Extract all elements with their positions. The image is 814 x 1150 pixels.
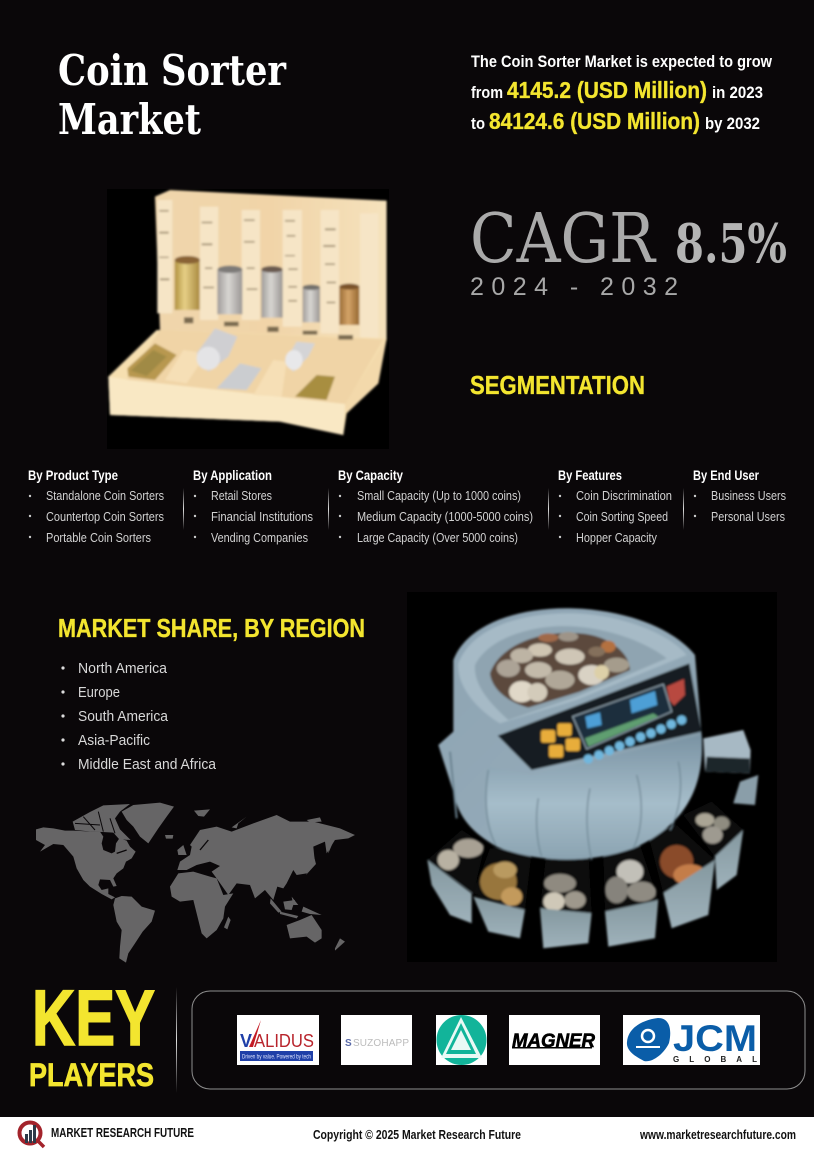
column: by features: By Features xyxy=(558,467,622,483)
title xyxy=(58,46,287,144)
market growth statement: in 2023 xyxy=(712,83,763,102)
logo: jcm global xyxy=(623,1015,760,1065)
region list: Asia-Pacific xyxy=(78,732,150,749)
key players heading xyxy=(29,973,155,1093)
logo: validus: V xyxy=(240,1031,252,1051)
logo: suzohapp xyxy=(341,1015,412,1065)
column: by end user xyxy=(693,467,786,524)
column: by application: Vending Companies xyxy=(211,530,308,545)
world map xyxy=(36,803,355,963)
column: by end user: By End User xyxy=(693,467,759,483)
column: by end user: Business Users xyxy=(711,488,786,503)
region list xyxy=(61,660,217,773)
red badge xyxy=(667,679,685,706)
logo: validus: ALIDUS xyxy=(254,1031,314,1051)
column: by capacity: Large Capacity (Over 5000 coins) xyxy=(357,530,518,545)
column: by capacity xyxy=(338,467,533,545)
market share heading: MARKET SHARE, BY REGION xyxy=(58,613,365,643)
column: by product type: Countertop Coin Sorters xyxy=(46,509,164,524)
CAGR xyxy=(470,200,787,301)
tray coins xyxy=(127,343,177,380)
market growth statement: The Coin Sorter Market is expected to grow xyxy=(471,52,773,71)
column: by capacity: Medium Capacity (1000-5000 coins) xyxy=(357,509,533,524)
segmentation table xyxy=(28,467,786,545)
key players heading: KEY xyxy=(32,973,155,1062)
blue buttons xyxy=(584,715,686,764)
coin values xyxy=(184,317,353,340)
logo: triangle xyxy=(436,1015,487,1065)
scale strips xyxy=(157,200,378,340)
column: by features xyxy=(558,467,672,545)
key players heading: PLAYERS xyxy=(29,1057,154,1093)
footer: Copyright © 2025 Market Research Future xyxy=(313,1128,521,1142)
market growth statement: by 2032 xyxy=(705,114,760,133)
market growth statement xyxy=(471,52,773,134)
market growth statement: 84124.6 (USD Million) xyxy=(489,108,700,134)
column: by product type xyxy=(28,467,164,545)
control panel xyxy=(498,663,702,770)
column: by capacity: By Capacity xyxy=(338,467,403,483)
hopper xyxy=(458,613,687,723)
logo: jcm global: GLOBAL xyxy=(673,1055,757,1064)
column: by end user: Personal Users xyxy=(711,509,785,524)
column: by application: Retail Stores xyxy=(211,488,272,503)
CAGR: 2024 - 2032 xyxy=(470,273,678,301)
column: by product type: Portable Coin Sorters xyxy=(46,530,151,545)
machine body xyxy=(438,608,702,859)
region list: North America xyxy=(78,660,168,677)
tray back wall xyxy=(155,190,387,357)
footer: MARKET RESEARCH FUTURE xyxy=(51,1126,194,1140)
region list: South America xyxy=(78,708,169,725)
coin pile xyxy=(490,632,630,708)
market growth statement: to xyxy=(471,114,485,133)
rear bins xyxy=(703,730,751,773)
bin interiors xyxy=(427,802,743,913)
logo: magner xyxy=(509,1015,600,1065)
segmentation heading: SEGMENTATION xyxy=(470,370,645,400)
logo: jcm global: JCM xyxy=(673,1018,757,1059)
column: by features: Coin Sorting Speed xyxy=(576,509,668,524)
column: by product type: By Product Type xyxy=(28,467,118,483)
title: Market xyxy=(58,95,201,144)
column: by features: Coin Discrimination xyxy=(576,488,672,503)
image: coin sorting tray xyxy=(107,189,389,449)
coin stacks xyxy=(175,260,200,310)
CAGR: CAGR xyxy=(470,200,657,279)
column: by product type: Standalone Coin Sorters xyxy=(46,488,164,503)
column: by application: Financial Institutions xyxy=(211,509,313,524)
image: coin sorter machine xyxy=(407,592,777,962)
dome xyxy=(486,735,702,859)
logo: validus: Driven by value. Powered by tech xyxy=(242,1054,311,1060)
logo: suzohapp: SUZOHAPP xyxy=(353,1038,409,1049)
column: by application: By Application xyxy=(193,467,272,483)
region list: Middle East and Africa xyxy=(78,756,217,773)
orange buttons xyxy=(541,723,580,758)
tray base xyxy=(108,330,387,435)
column: by capacity: Small Capacity (Up to 1000 coins) xyxy=(357,488,521,503)
footer xyxy=(0,1117,814,1150)
market growth statement: 4145.2 (USD Million) xyxy=(507,77,707,103)
display xyxy=(573,684,672,749)
footer logo icon xyxy=(20,1122,44,1147)
title: Coin Sorter xyxy=(58,46,287,95)
logo: validus xyxy=(237,1015,319,1065)
region list: Europe xyxy=(78,684,120,701)
column: by application xyxy=(193,467,313,545)
logo: suzohapp: S xyxy=(345,1038,352,1049)
coins in bins xyxy=(438,813,730,911)
CAGR: 8.5% xyxy=(675,213,787,275)
key players panel xyxy=(192,991,805,1089)
bin fronts xyxy=(427,830,743,948)
market growth statement: from xyxy=(471,83,503,102)
column: by features: Hopper Capacity xyxy=(576,530,657,545)
logo: magner: MAGNER xyxy=(512,1031,595,1052)
